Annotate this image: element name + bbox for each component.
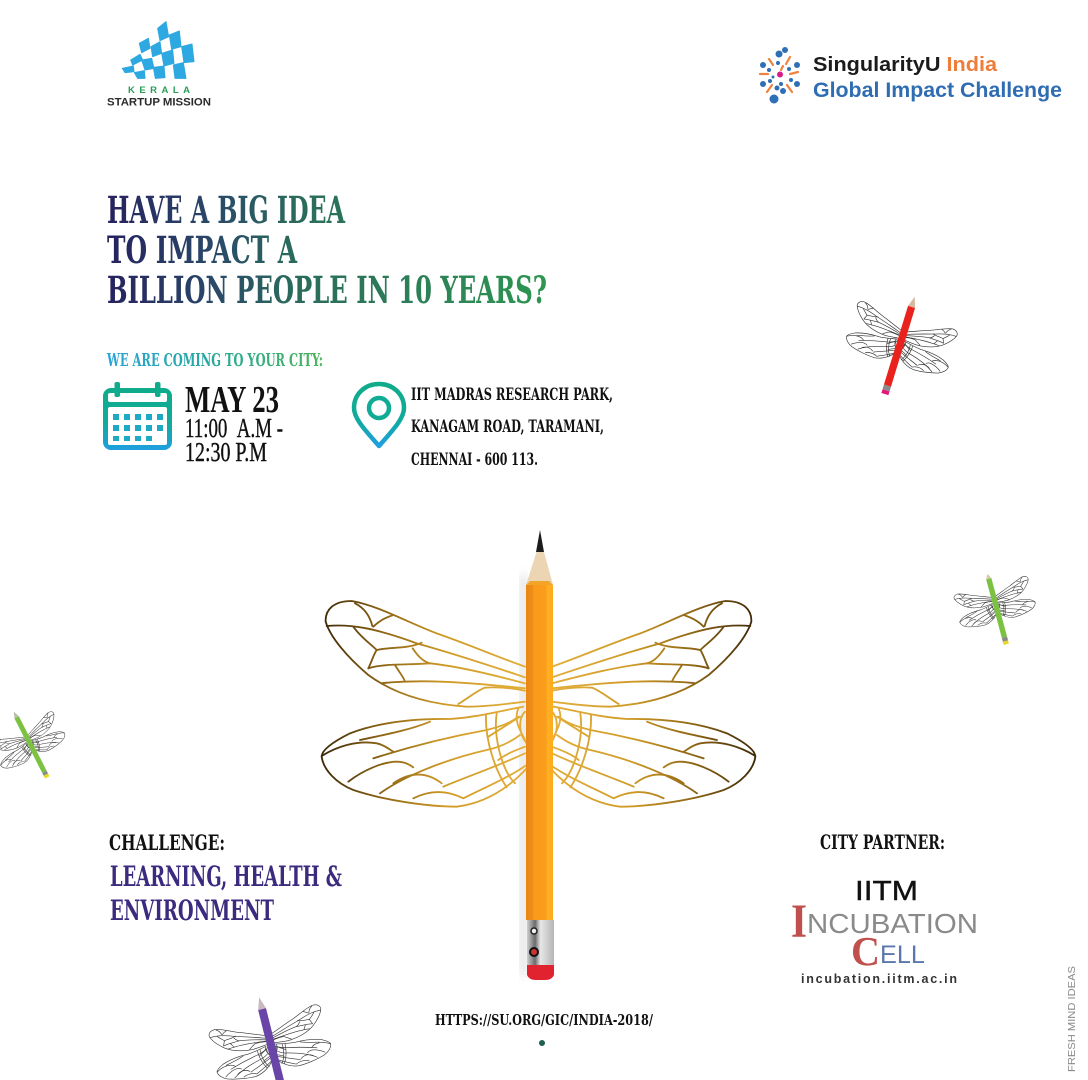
dot bbox=[539, 1040, 545, 1046]
icon: calendar bbox=[103, 382, 172, 450]
dragonfly: purple pencil bbox=[202, 983, 341, 1080]
challenge topics bbox=[110, 860, 342, 927]
address bbox=[411, 385, 613, 470]
address: KANAGAM ROAD, TARAMANI, bbox=[411, 417, 604, 437]
title: BILLION PEOPLE IN 10 YEARS? bbox=[107, 268, 547, 312]
dragonfly: green pencil right bbox=[949, 564, 1044, 654]
title: HAVE A BIG IDEA bbox=[107, 188, 346, 232]
title bbox=[107, 188, 547, 312]
address: CHENNAI - 600 113. bbox=[411, 450, 538, 470]
logo line: SingularityU India: SingularityU India bbox=[813, 53, 998, 76]
city partner label: CITY PARTNER: bbox=[820, 830, 945, 854]
logo word: Startup Mission: STARTUP MISSION bbox=[107, 96, 211, 108]
website url: HTTPS://SU.ORG/GIC/INDIA-2018/ bbox=[435, 1011, 653, 1029]
dragonfly: green pencil left bbox=[0, 695, 79, 794]
date and time: MAY 23 bbox=[185, 379, 279, 421]
challenge topics: LEARNING, HEALTH & bbox=[110, 860, 342, 893]
logo: IITM Incubation Cell: NCUBATION bbox=[807, 908, 978, 939]
icon: checker flag bbox=[122, 22, 194, 78]
logo: IITM Incubation Cell: incubation.iitm.ac.in bbox=[801, 972, 957, 986]
subheading: coming to your city: WE ARE COMING TO YOUR CITY: bbox=[106, 350, 323, 371]
challenge topics: ENVIRONMENT bbox=[110, 894, 274, 927]
date and time: 12:30 P.M bbox=[185, 437, 267, 467]
challenge label: CHALLENGE: bbox=[109, 830, 225, 855]
icon: location pin bbox=[354, 384, 404, 446]
date and time bbox=[185, 379, 283, 467]
logo: SingularityU India Global Impact Challenge bbox=[760, 47, 1062, 104]
logo line: Global Impact Challenge: Global Impact Challenge bbox=[813, 79, 1062, 102]
logo: IITM Incubation Cell: I bbox=[791, 895, 807, 948]
logo word: Kerala: KERALA bbox=[128, 85, 190, 96]
wings bbox=[322, 601, 755, 807]
logo: IITM Incubation Cell: ELL bbox=[880, 941, 925, 969]
illustration: pencil dragonfly bbox=[322, 530, 755, 980]
logo: IITM Incubation Cell bbox=[791, 875, 978, 986]
challenge block bbox=[109, 830, 342, 927]
address: IIT MADRAS RESEARCH PARK, bbox=[411, 385, 613, 405]
date and time: 11:00 A.M - bbox=[185, 413, 283, 443]
vertical credit: FRESH MIND IDEAS bbox=[1066, 966, 1078, 1072]
title: TO IMPACT A bbox=[107, 228, 298, 272]
pencil shadow bbox=[520, 575, 527, 975]
dragonfly: red pencil bbox=[834, 281, 965, 409]
icon: radial dots bbox=[760, 47, 800, 104]
logo: Kerala Startup Mission bbox=[107, 22, 211, 109]
logo: IITM Incubation Cell: C bbox=[851, 928, 880, 974]
pencil bbox=[526, 530, 554, 980]
logo: IITM Incubation Cell: IITM bbox=[855, 875, 918, 906]
